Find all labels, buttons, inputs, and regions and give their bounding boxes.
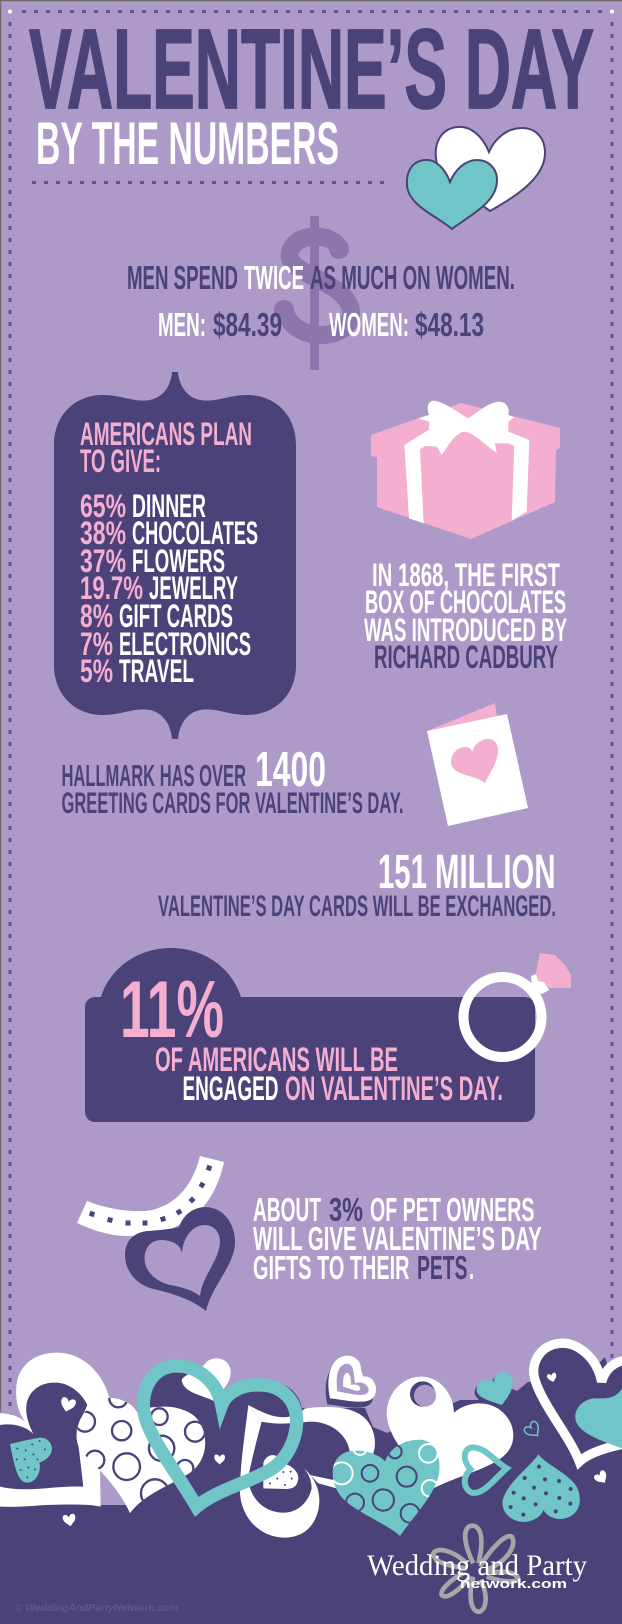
text: Hallmark fact: HALLMARK HAS OVER xyxy=(62,758,246,793)
left heart cluster xyxy=(0,1353,375,1538)
logo: Wedding and Party Network xyxy=(367,1526,587,1612)
big number: 11% xyxy=(120,965,224,1055)
icon: two hearts xyxy=(407,127,545,229)
polka white heart xyxy=(75,1389,205,1513)
white teardrop xyxy=(182,1358,231,1402)
list of gifts: ELECTRONICS xyxy=(119,626,251,662)
icon: pet collar xyxy=(77,1156,224,1236)
list of gifts: 38% xyxy=(80,515,126,551)
list of gifts: 65% xyxy=(80,488,126,524)
list of gifts: 8% xyxy=(80,598,113,634)
panel: engaged xyxy=(85,948,535,1122)
text: pets fact: 3% xyxy=(329,1191,363,1228)
text: 151 million cards xyxy=(158,846,556,923)
list of gifts: 19.7% xyxy=(80,570,143,606)
engaged text: ENGAGED xyxy=(182,1070,278,1108)
logo flower xyxy=(433,1526,518,1612)
list of gifts: GIFT CARDS xyxy=(119,598,233,634)
text: men spend twice xyxy=(127,259,515,296)
white outlined heart xyxy=(0,1353,110,1507)
icon: greeting card xyxy=(427,703,528,826)
text: pets fact: GIFTS TO THEIR xyxy=(253,1249,410,1286)
list of gifts: FLOWERS xyxy=(132,543,225,579)
teal upside-down polka heart xyxy=(502,1454,580,1522)
list of gifts: DINNER xyxy=(132,488,206,524)
white heart with hole xyxy=(387,1377,513,1488)
icon: diamond ring xyxy=(464,953,571,1057)
engaged text xyxy=(155,1041,503,1108)
text: pets fact: ABOUT xyxy=(253,1191,321,1228)
text: pets fact: . xyxy=(469,1249,474,1286)
text: spend amounts: WOMEN: xyxy=(329,306,409,343)
icon: dollar sign xyxy=(274,216,351,370)
small teal polka heart xyxy=(10,1438,52,1483)
icon: gift box xyxy=(371,401,560,539)
text: men spend twice: MEN SPEND xyxy=(127,259,238,296)
list of gifts xyxy=(80,488,258,689)
right heart cluster xyxy=(326,1343,622,1536)
teal small heart xyxy=(475,1372,513,1408)
list of gifts: TRAVEL xyxy=(119,653,194,689)
panel heading: TO GIVE: xyxy=(80,443,161,479)
text: Hallmark fact: 1400 xyxy=(255,743,326,797)
list of gifts: 5% xyxy=(80,653,113,689)
list of gifts: 37% xyxy=(80,543,126,579)
large teal outlined heart xyxy=(143,1366,297,1507)
panel: Americans plan to give xyxy=(54,372,296,739)
text: spend amounts: MEN: xyxy=(158,306,206,343)
white heart outline right xyxy=(240,1405,375,1538)
navy shadow of teal heart xyxy=(143,1366,302,1417)
navy base xyxy=(0,1357,622,1624)
icon: pet heart tag xyxy=(125,1207,235,1311)
logo: Wedding and Party Network: Wedding and Party xyxy=(367,1549,587,1582)
text: spend amounts xyxy=(158,306,484,343)
footer hearts band xyxy=(0,1343,622,1624)
small white polka heart xyxy=(263,1455,298,1489)
text: Hallmark fact xyxy=(62,743,404,820)
tiny teal outline heart xyxy=(523,1420,543,1440)
teal outlined small heart xyxy=(465,1447,507,1493)
text: spend amounts: $48.13 xyxy=(415,306,484,343)
list of gifts: JEWELRY xyxy=(149,570,238,606)
white outlined heart right xyxy=(534,1343,622,1462)
small concentric heart xyxy=(326,1356,376,1408)
logo: Wedding and Party Network: network.com xyxy=(460,1576,567,1591)
panel heading: AMERICANS PLAN xyxy=(80,416,252,452)
list of gifts: CHOCOLATES xyxy=(132,515,258,551)
engaged text: OF AMERICANS WILL BE xyxy=(155,1041,398,1079)
teal heart at edge xyxy=(575,1388,622,1448)
text: pets fact xyxy=(253,1191,542,1286)
copyright: © WeddingAndPartyNetwork.com xyxy=(15,1603,178,1614)
list of gifts: 7% xyxy=(80,626,113,662)
teal ring polka heart xyxy=(331,1440,440,1536)
text: pets fact: PETS xyxy=(417,1249,468,1286)
text: men spend twice: TWICE xyxy=(244,259,304,296)
panel heading xyxy=(80,416,252,479)
text: spend amounts: $84.39 xyxy=(213,306,282,343)
subtitle: BY THE NUMBERS xyxy=(36,110,339,177)
text: chocolates fact xyxy=(364,557,567,675)
